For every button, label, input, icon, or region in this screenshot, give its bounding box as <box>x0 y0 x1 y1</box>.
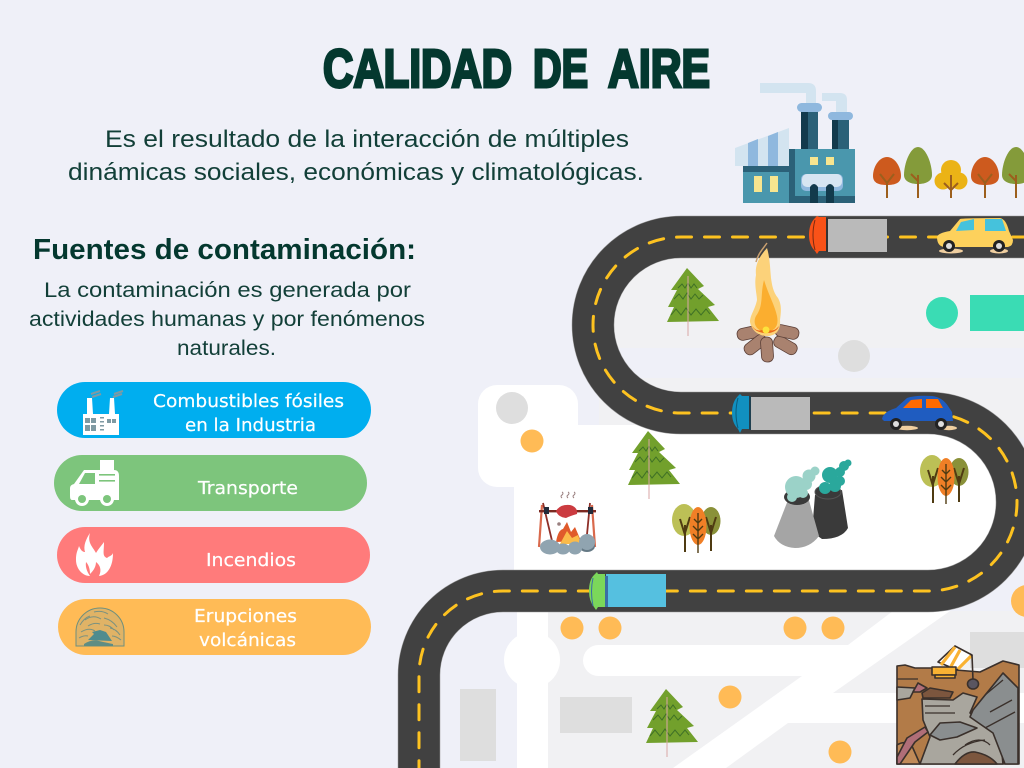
description text: La contaminación es generada por <box>44 279 411 302</box>
row of autumn trees <box>873 147 1024 198</box>
winding road <box>419 237 1024 768</box>
icon: white truck <box>70 460 119 506</box>
description text: actividades humanas y por fenómenos <box>29 308 425 331</box>
label: erupciones volcánicas <box>194 606 297 651</box>
icon: white flame <box>76 533 113 576</box>
orange truck <box>809 216 887 254</box>
icon: spit roast campfire <box>539 492 596 554</box>
green and blue truck <box>589 572 666 610</box>
map background blocks <box>460 258 1024 768</box>
pill: transporte <box>54 455 367 511</box>
intro text <box>68 126 644 186</box>
icon: pine tree lower <box>646 689 698 757</box>
label: combustibles fósiles: Combustibles fósiles <box>153 391 344 412</box>
label: combustibles fósiles <box>153 391 344 436</box>
intro text: dinámicas sociales, económicas y climatológicas. <box>68 159 644 186</box>
title: CALIDAD <box>323 39 512 99</box>
title: AIRE <box>608 39 710 99</box>
title: DE <box>533 39 588 99</box>
icon: pine tree upper <box>667 268 719 336</box>
icon: tree trio centre <box>672 504 720 553</box>
title <box>323 39 710 99</box>
label: erupciones volcánicas: Erupciones <box>194 606 297 627</box>
description text <box>29 279 425 360</box>
icon: bonfire <box>736 243 800 362</box>
label: transporte: Transporte <box>197 478 298 499</box>
heading: fuentes de contaminación: Fuentes de contaminación: <box>33 234 416 266</box>
icon: cooling towers <box>774 460 852 548</box>
icon: white factory <box>83 391 123 435</box>
icon: tree trio right <box>920 455 968 504</box>
icon: volcano engraving <box>76 608 124 646</box>
label: incendios: Incendios <box>206 550 296 571</box>
blue truck <box>732 394 810 433</box>
description text: naturales. <box>177 337 276 360</box>
pill: combustibles fósiles <box>57 382 371 438</box>
blue car <box>882 396 957 430</box>
label: combustibles fósiles: en la Industria <box>185 415 316 436</box>
pill: incendios <box>57 527 370 583</box>
pill: erupciones volcánicas <box>58 599 371 655</box>
label: erupciones volcánicas: volcánicas <box>199 630 296 651</box>
yellow car <box>937 218 1013 254</box>
icon: factory <box>735 83 855 203</box>
icon: open pit mine with crane <box>897 646 1019 764</box>
intro text: Es el resultado de la interacción de múltiples <box>105 126 629 153</box>
icon: pine tree middle <box>628 431 680 499</box>
